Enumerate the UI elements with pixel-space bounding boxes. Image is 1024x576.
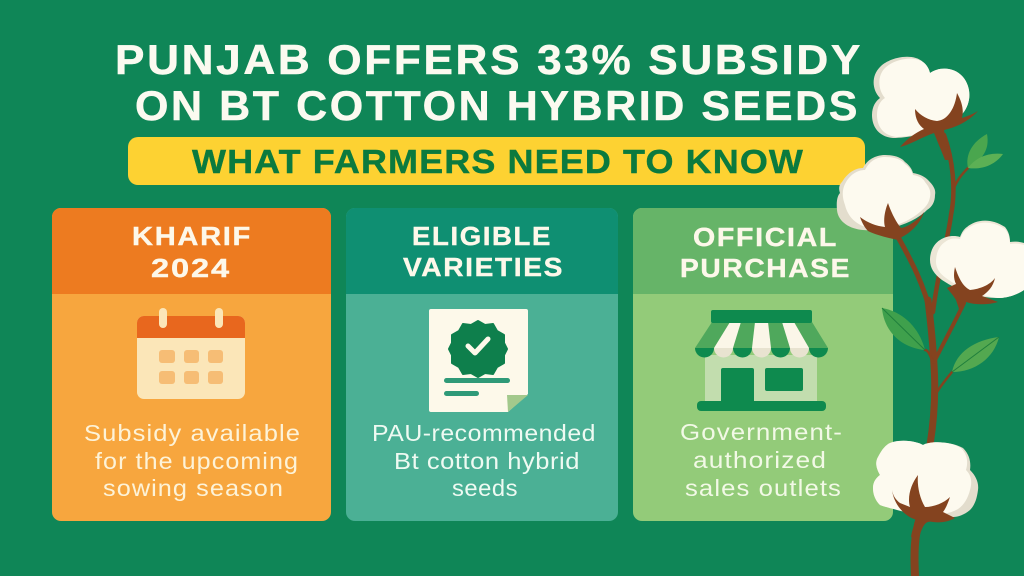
panel header: Eligible Varieties [346,208,618,294]
text: Official Purchase description: Government- [680,419,843,445]
plant stems [898,135,968,576]
title: PUNJAB OFFERS 33% SUBSIDY [115,36,863,83]
heading: Official Purchase [680,222,851,283]
panel: Official Purchase [633,208,893,521]
text: Kharif description: sowing season [103,475,284,501]
title [115,36,863,129]
text: Kharif description [84,420,301,501]
icon: storefront [695,310,828,411]
cotton boll: middle [837,155,935,240]
subtitle banner [128,137,865,185]
text: Kharif description: Subsidy available [84,420,301,446]
text: Eligible Varieties description [372,420,596,501]
heading: Official Purchase: OFFICIAL [693,222,838,252]
cotton boll: bottom [873,441,978,537]
text: Eligible Varieties description: PAU-recommended [372,420,596,446]
text: Official Purchase description: authorized [693,447,827,473]
panel: Eligible Varieties [346,208,618,521]
title: ON BT COTTON HYBRID SEEDS [135,82,860,129]
heading: Eligible Varieties [403,221,564,282]
heading: Official Purchase: PURCHASE [680,253,851,283]
icon: calendar [137,308,245,399]
panel: Kharif 2024 [52,208,331,521]
text: Eligible Varieties description: seeds [452,475,518,501]
subtitle banner: WHAT FARMERS NEED TO KNOW [192,143,804,180]
panel header: Official Purchase [633,208,893,294]
text: Official Purchase description: sales outlets [685,475,842,501]
cotton boll: right [930,221,1024,312]
icon: certified document [429,309,528,412]
heading: Eligible Varieties: ELIGIBLE [412,221,552,251]
text: Kharif description: for the upcoming [95,448,299,474]
panel header: Kharif 2024 [52,208,331,294]
cotton boll: top [872,57,978,160]
text: Official Purchase description [680,419,843,501]
heading: Kharif 2024: 2024 [151,253,231,283]
leaves [882,134,1003,372]
text: Eligible Varieties description: Bt cotton hybrid [394,448,580,474]
heading: Eligible Varieties: VARIETIES [403,252,564,282]
heading: Kharif 2024 [132,221,252,283]
heading: Kharif 2024: KHARIF [132,221,252,251]
illustration: cotton plant [837,57,1024,576]
